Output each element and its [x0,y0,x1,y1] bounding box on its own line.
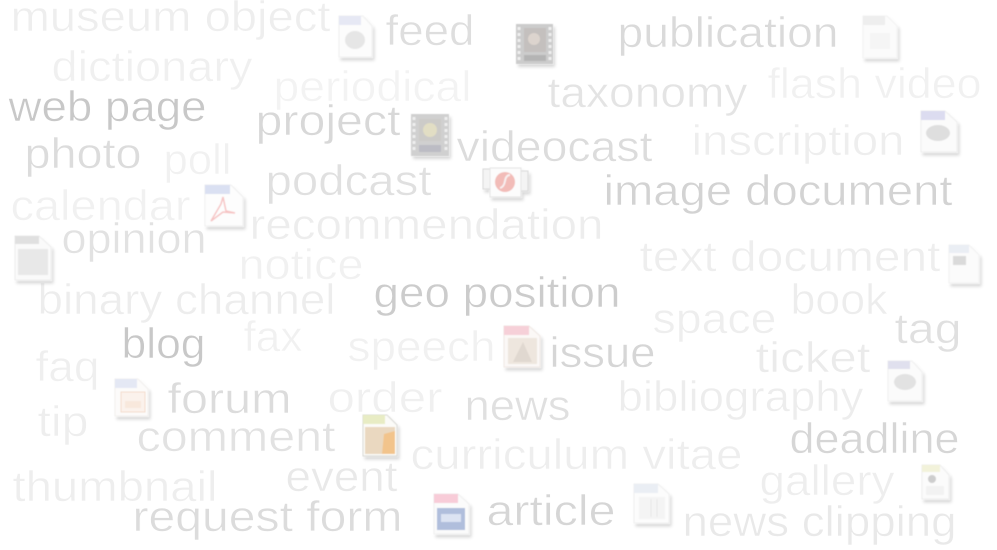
tag: feed: feed [386,7,474,55]
tag: thumbnail: thumbnail [12,463,218,511]
tag: web page: web page [7,83,206,131]
icon: publication xls file [863,16,897,58]
icon: opinion document [15,236,51,280]
tag: book: book [790,276,888,324]
tag: space: space [652,295,776,343]
icon: audio file [888,361,922,401]
tag: comment: comment [136,413,336,461]
tag: image document: image document [604,167,953,215]
icon: article file [634,484,669,523]
tag: gallery: gallery [760,457,895,505]
tag: request form: request form [132,493,402,541]
tag: binary channel: binary channel [38,276,336,324]
tag: notice: notice [238,241,364,289]
icon: mp3 audio file [921,111,957,152]
tag: taxonomy: taxonomy [548,69,748,117]
icon: real media file [434,494,469,534]
icon: forum file [115,379,148,416]
tag: tag: tag [894,305,962,353]
tag: event: event [286,453,398,501]
tag: news: news [464,382,570,430]
tag: bibliography: bibliography [618,373,864,421]
tag: faq: faq [36,343,100,391]
tag: calendar: calendar [10,182,190,230]
tag: videocast: videocast [456,123,653,171]
tag: opinion: opinion [62,215,206,263]
tag: ticket: ticket [756,334,871,382]
tag: dictionary: dictionary [52,43,253,91]
tag: flash video: flash video [768,60,982,108]
tag: project: project [256,97,401,145]
tag: speech: speech [348,323,496,371]
tag: forum: forum [168,375,292,423]
icon: text document file [949,245,979,283]
tag: recommendation: recommendation [250,201,604,249]
tag: text document: text document [640,233,941,281]
tag: fax: fax [244,313,303,361]
tag: periodical: periodical [274,63,472,111]
tag: tip: tip [38,398,88,446]
tag: news clipping: news clipping [682,498,956,546]
icon: issue image file [504,326,540,367]
tag: issue: issue [550,329,656,377]
tag: podcast: podcast [266,157,432,205]
tag: geo position: geo position [374,269,620,317]
tag: publication: publication [618,9,838,57]
icon: mp4 film [411,114,449,156]
icon: deadline file [922,465,949,499]
tag: poll: poll [164,136,232,184]
icon: comment photo file [363,415,397,456]
tag: article: article [486,487,616,535]
icon: flash video [483,168,528,197]
tag: order: order [328,374,442,422]
tag: curriculum vitae: curriculum vitae [410,431,742,479]
tag: deadline: deadline [790,415,960,463]
tag: blog: blog [122,320,206,368]
icon: pdf file [205,185,243,226]
icon: avi film [516,24,553,64]
tag: photo: photo [24,130,142,178]
tag: inscription: inscription [692,117,904,165]
icon: feed audio file [339,16,372,57]
